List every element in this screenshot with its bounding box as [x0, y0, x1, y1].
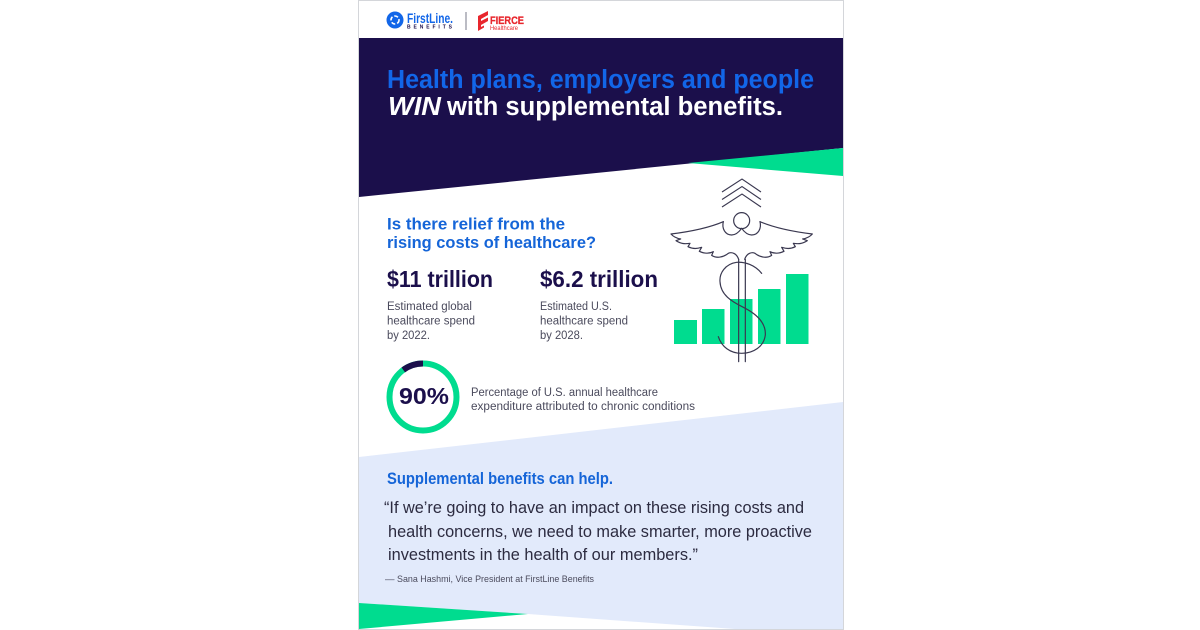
logo divider	[466, 12, 467, 30]
donut chart: 90%	[390, 363, 456, 430]
logo: FirstLine Benefits	[386, 11, 453, 30]
quote attribution: —	[385, 574, 395, 585]
icon: caduceus with dollar sign	[671, 213, 812, 362]
header logos	[386, 11, 524, 32]
stat: U.S. spend: healthcare spend	[540, 316, 628, 328]
green banner accent	[688, 148, 843, 176]
stat: global spend: healthcare spend	[387, 316, 475, 328]
title: with supplemental benefits.	[446, 93, 783, 121]
logo: FirstLine Benefits: BENEFITS	[407, 24, 453, 30]
title: WIN	[388, 93, 442, 121]
stat: global spend: Estimated global	[387, 301, 472, 313]
quote	[384, 498, 812, 564]
section heading: supplemental benefits: Supplemental benefits can help.	[387, 470, 613, 488]
stat: U.S. spend: $6.2 trillion	[540, 266, 658, 292]
chronic conditions text: expenditure attributed to chronic conditions	[471, 401, 695, 413]
donut chart: 90%: 90%	[399, 383, 449, 409]
chronic conditions text	[471, 387, 695, 413]
title	[387, 66, 814, 121]
stat: global spend: $11 trillion	[387, 266, 493, 292]
icon: upward chevrons	[722, 179, 761, 207]
section heading: rising costs: Is there relief from the	[387, 214, 565, 234]
stat: U.S. spend	[540, 266, 658, 342]
green footer accent	[359, 603, 528, 629]
stat: U.S. spend: Estimated U.S.	[540, 301, 612, 313]
bar chart	[674, 274, 808, 344]
quote: health concerns, we need to make smarter, more proactive	[388, 522, 812, 541]
quote attribution: Sana Hashmi, Vice President at FirstLine Benefits	[397, 574, 594, 585]
section heading: rising costs	[387, 214, 596, 252]
section heading: rising costs: rising costs of healthcare?	[387, 233, 596, 252]
chronic conditions text: Percentage of U.S. annual healthcare	[471, 387, 658, 399]
navy header banner	[359, 38, 843, 197]
quote: investments in the health of our members.”	[388, 545, 698, 564]
stat: U.S. spend: by 2028.	[540, 330, 583, 342]
logo: Fierce Healthcare: Healthcare	[490, 25, 518, 32]
stat: global spend	[387, 266, 493, 342]
quote: “If we’re going to have an impact on these rising costs and	[384, 498, 804, 517]
logo: Fierce Healthcare	[478, 11, 524, 32]
stat: global spend: by 2022.	[387, 330, 430, 342]
title: Health plans, employers and people	[387, 66, 814, 94]
logo: FirstLine Benefits: FirstLine.	[407, 11, 453, 26]
page sheet	[358, 0, 844, 630]
logo: Fierce Healthcare: FIERCE	[490, 15, 524, 27]
light blue lower panel	[359, 402, 843, 629]
illustration: caduceus and bar chart	[671, 179, 812, 362]
